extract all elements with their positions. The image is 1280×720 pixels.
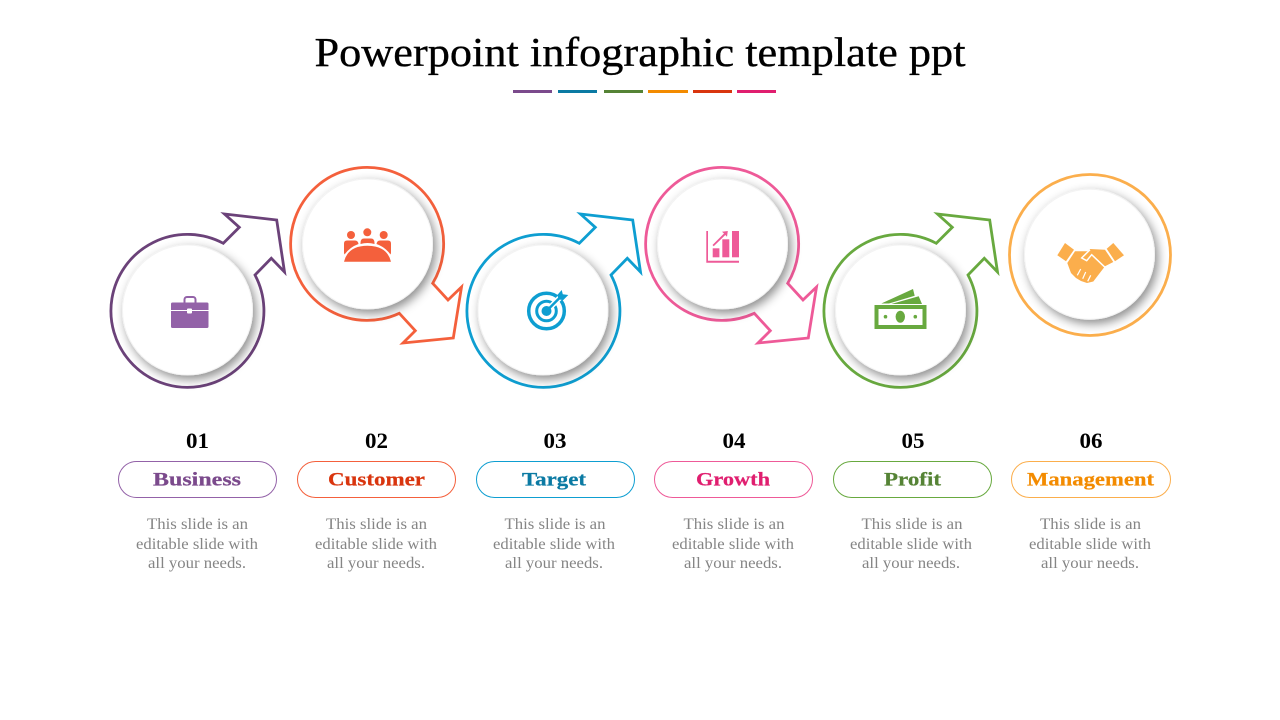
description 02: all your needs. bbox=[327, 555, 425, 572]
description 05: all your needs. bbox=[862, 555, 960, 572]
number 01: 01 bbox=[186, 428, 209, 453]
description 06: all your needs. bbox=[1041, 555, 1139, 572]
pill: Growth: Growth bbox=[696, 470, 771, 490]
number 02: 02 bbox=[365, 428, 388, 453]
description 03: editable slide with bbox=[493, 536, 615, 553]
title underline color dashes bbox=[513, 90, 776, 93]
step 5 inner circle bbox=[836, 245, 966, 375]
description 06: This slide is an bbox=[1040, 516, 1141, 533]
description 01 bbox=[136, 516, 258, 572]
number 05: 05 bbox=[902, 428, 924, 453]
label 04 block bbox=[654, 428, 812, 572]
description 04: editable slide with bbox=[672, 536, 794, 553]
description 03: This slide is an bbox=[504, 516, 606, 533]
pill: Target bbox=[476, 462, 634, 498]
pill: Growth bbox=[654, 462, 812, 498]
pill: Customer: Customer bbox=[328, 470, 426, 490]
pill: Profit: Profit bbox=[884, 470, 942, 490]
number 04: 04 bbox=[722, 428, 746, 453]
description 01: editable slide with bbox=[136, 536, 258, 553]
step 3 arrow ring: blue bbox=[467, 214, 640, 387]
number 03: 03 bbox=[544, 428, 566, 453]
step 5 arrow ring: green bbox=[824, 214, 998, 387]
icon: handshake bbox=[1057, 243, 1124, 283]
description 05: This slide is an bbox=[862, 516, 962, 533]
description 03 bbox=[493, 516, 615, 572]
icon: team around table bbox=[344, 228, 391, 262]
description 06 bbox=[1029, 516, 1151, 572]
title: Powerpoint infographic template ppt bbox=[314, 29, 966, 75]
icon: target bbox=[529, 290, 568, 329]
pill: Profit bbox=[834, 462, 992, 498]
label 05 block bbox=[834, 428, 992, 572]
description 01: This slide is an bbox=[147, 516, 248, 533]
step 1 inner circle bbox=[122, 245, 252, 375]
label 01 block bbox=[118, 428, 276, 572]
step 6 inner circle bbox=[1024, 189, 1154, 319]
pill: Management: Management bbox=[1027, 470, 1155, 490]
pill: Customer bbox=[298, 462, 456, 498]
label 02 block bbox=[298, 428, 456, 572]
number 06: 06 bbox=[1080, 428, 1102, 453]
step 6 ring: amber bbox=[1010, 174, 1170, 336]
icon: money bbox=[874, 289, 926, 329]
description 04: all your needs. bbox=[684, 555, 782, 572]
description 04: This slide is an bbox=[684, 516, 784, 533]
pill: Management bbox=[1012, 462, 1170, 498]
description 05: editable slide with bbox=[850, 536, 972, 553]
description 02: This slide is an bbox=[326, 516, 427, 533]
description 05 bbox=[850, 516, 972, 572]
icon: briefcase bbox=[171, 297, 208, 328]
description 06: editable slide with bbox=[1029, 536, 1151, 553]
label 03 block bbox=[476, 428, 634, 572]
step 3 inner circle bbox=[478, 245, 608, 375]
step 4 inner circle bbox=[658, 179, 788, 309]
description 03: all your needs. bbox=[505, 555, 603, 572]
pill: Business bbox=[118, 462, 276, 498]
description 04 bbox=[672, 516, 794, 572]
label 06 block bbox=[1012, 428, 1170, 572]
step 4 arrow ring: pink bbox=[646, 167, 816, 343]
description 02: editable slide with bbox=[315, 536, 437, 553]
step 2 inner circle bbox=[302, 179, 432, 309]
description 02 bbox=[315, 516, 437, 572]
step 2 arrow ring: orange bbox=[291, 167, 462, 343]
icon: growth chart bbox=[706, 231, 739, 263]
description 01: all your needs. bbox=[148, 555, 246, 572]
pill: Target: Target bbox=[522, 470, 587, 490]
pill: Business: Business bbox=[153, 470, 241, 490]
step 1 arrow ring: purple bbox=[111, 214, 284, 387]
